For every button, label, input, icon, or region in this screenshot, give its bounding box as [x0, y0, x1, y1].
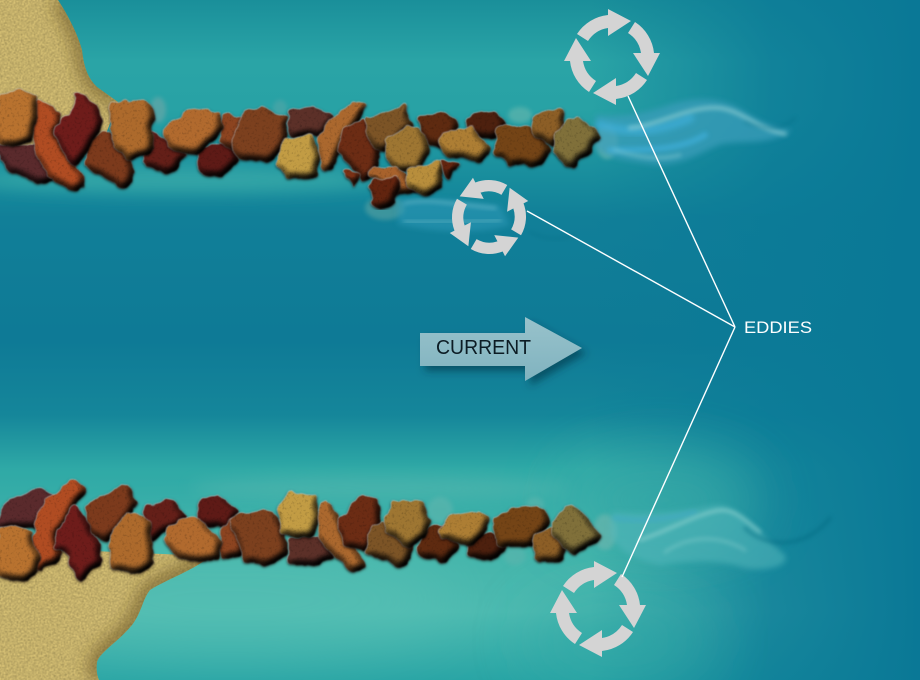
eddy: top	[564, 9, 660, 105]
eddy: middle	[432, 160, 546, 274]
wake: top breakwater	[596, 99, 795, 165]
current arrow	[420, 317, 582, 381]
label: current: CURRENT	[436, 337, 531, 359]
eddy: bottom	[550, 561, 646, 657]
leader lines to eddies	[527, 96, 735, 577]
label: eddies: EDDIES	[744, 318, 812, 337]
turbulent water along the top breakwater	[0, 97, 618, 220]
turbulent water along the bottom breakwater	[190, 476, 617, 565]
wake: bottom breakwater	[610, 505, 830, 569]
wake: inner breakwater	[398, 199, 575, 238]
rocks: top breakwater	[3, 96, 594, 201]
sand: bottom beach	[0, 551, 204, 680]
sand: top beach	[0, 0, 118, 146]
rocks: bottom breakwater	[3, 486, 594, 576]
